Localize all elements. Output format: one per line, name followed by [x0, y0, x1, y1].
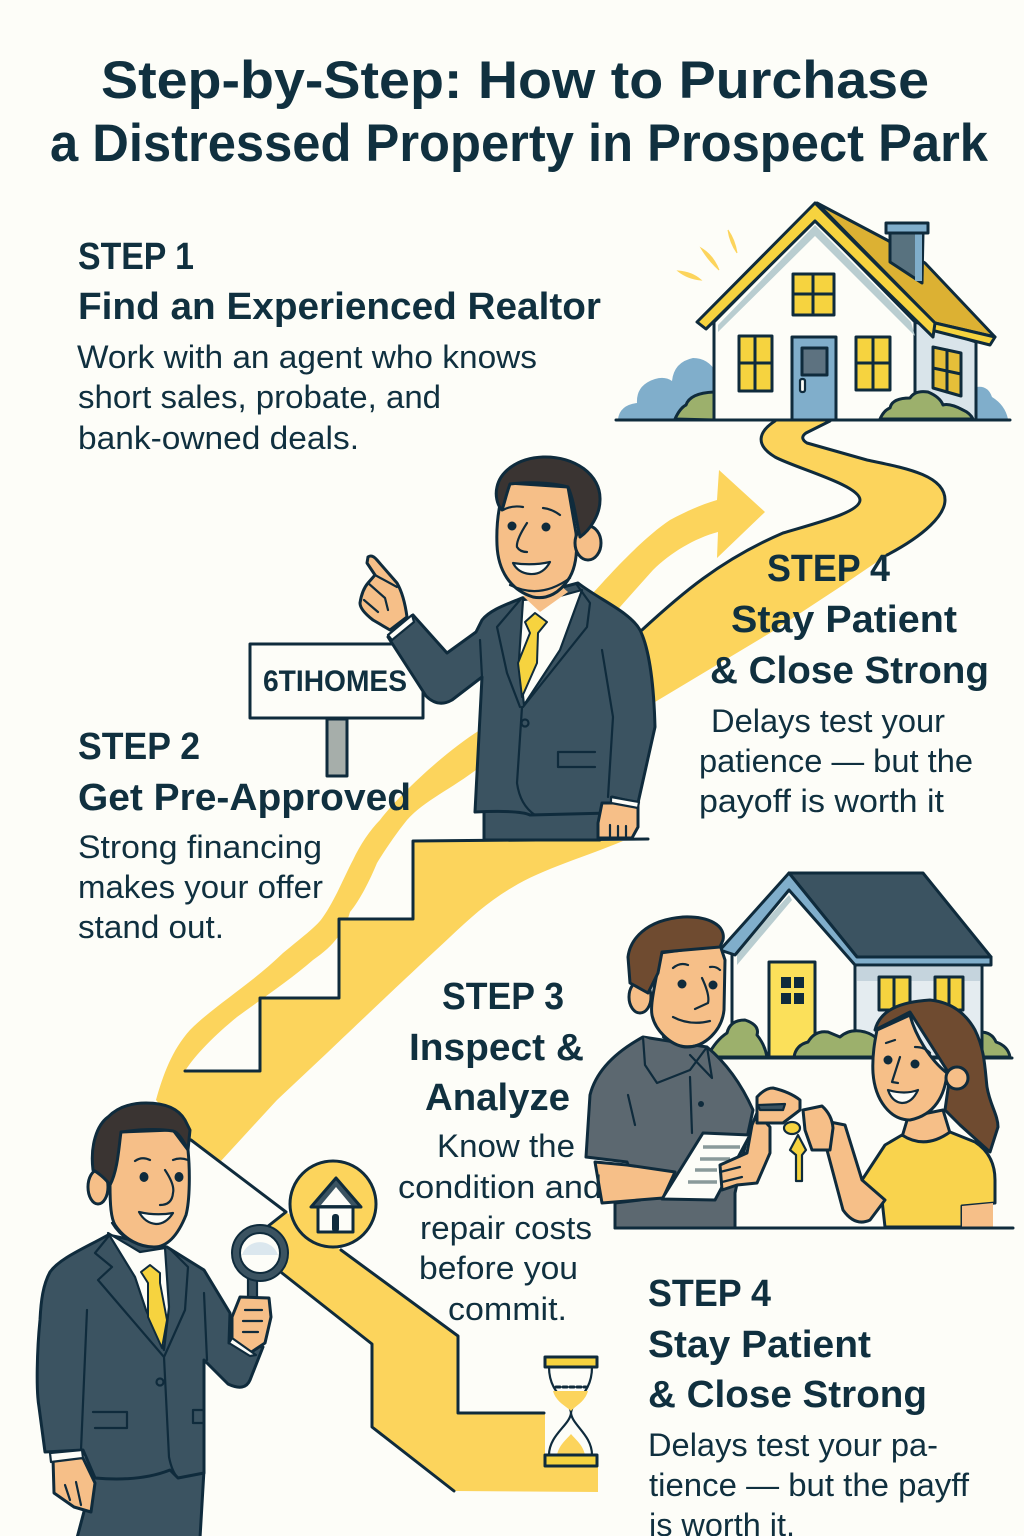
facial features: [503, 506, 570, 591]
shirt: [586, 1037, 753, 1228]
holding hand: [232, 1297, 271, 1353]
shirt: [108, 1233, 169, 1350]
text block: step 3: [398, 976, 602, 1327]
bushes in front: [675, 392, 714, 420]
sign: 6TIHOMES: [250, 644, 423, 776]
hand at side: [53, 1458, 95, 1512]
text block: step 3: repair costs: [420, 1210, 592, 1246]
sign: 6TIHOMES: 6TIHOMES: [263, 665, 407, 698]
text block: step 4 upper: Stay Patient: [731, 599, 957, 641]
illustration: man handing keys: [586, 917, 1013, 1228]
right wall: [855, 965, 982, 1057]
illustration: second house: [707, 873, 1012, 1058]
text block: step 4 lower: & Close Strong: [648, 1374, 927, 1416]
shirt: [519, 590, 582, 705]
cuff: [388, 615, 414, 640]
text block: step 3: condition and: [398, 1169, 602, 1205]
right arm and hand: [720, 1113, 770, 1190]
text block: step 1: Find an Experienced Realtor: [78, 286, 601, 328]
text block: step 4 lower: STEP 4: [648, 1273, 771, 1315]
yellow staircase: [156, 839, 648, 1162]
front wall: [714, 220, 915, 420]
curved arrow band: [156, 470, 765, 1100]
lower left window: [739, 336, 772, 391]
text block: step 4 lower: tience — but the payff: [649, 1467, 969, 1503]
dark roof: [789, 873, 991, 957]
collar and placket: [643, 1037, 712, 1083]
hair back: [875, 1000, 998, 1152]
title: a Distressed Property in Prospect Park: [50, 114, 988, 173]
yellow door: [769, 962, 815, 1057]
tie: [518, 613, 547, 697]
hair: [628, 917, 723, 993]
tie: [141, 1265, 167, 1348]
pointing hand: [360, 556, 407, 630]
text block: step 1: short sales, probate, and: [78, 379, 441, 415]
ear: [629, 981, 651, 1013]
keys: [784, 1122, 806, 1181]
jacket lines: [480, 585, 613, 815]
text block: step 1: bank-owned deals.: [78, 420, 359, 456]
ear: [946, 1067, 968, 1089]
jacket: [37, 1235, 263, 1479]
lower right window: [856, 337, 890, 390]
text block: step 4 lower: Stay Patient: [648, 1324, 871, 1366]
bushes behind house: [618, 358, 716, 420]
text block: step 2: Strong financing: [78, 829, 322, 865]
text block: step 3: STEP 3: [442, 976, 564, 1018]
text block: step 3: Analyze: [425, 1077, 570, 1119]
winding road to house: [642, 421, 945, 702]
side window: [933, 347, 961, 396]
jacket: [388, 583, 655, 815]
sleeve skin: [962, 1203, 993, 1227]
text block: step 4 lower: [648, 1273, 969, 1536]
chimney: [886, 223, 928, 283]
paper: [662, 1133, 750, 1200]
ear: [88, 1170, 108, 1204]
main roof: [817, 203, 995, 337]
left wall: [732, 890, 855, 1057]
shirt: [862, 1132, 995, 1227]
hand: [803, 1106, 833, 1150]
hair: [92, 1103, 190, 1185]
cuff: [50, 1450, 83, 1462]
ground line: [616, 418, 1010, 422]
trousers: [77, 1470, 204, 1536]
text block: step 3: Know the: [437, 1128, 575, 1164]
text block: step 2: [78, 726, 411, 945]
door: [792, 337, 836, 420]
trousers: [484, 808, 606, 840]
title: Step-by-Step: How to Purchase: [101, 51, 929, 110]
man's features: [112, 1158, 188, 1247]
text block: step 4 upper: Delays test your: [711, 703, 945, 739]
text block: step 3: before you: [419, 1250, 578, 1286]
text block: step 2: makes your offer: [78, 869, 323, 905]
front bushes: [707, 1020, 767, 1057]
text block: step 1: [77, 236, 601, 456]
lapels and seams: [81, 1237, 207, 1478]
magnifying glass: [232, 1225, 288, 1304]
icon: hourglass: [545, 1357, 597, 1466]
illustration: realtor with magnifying glass: [37, 1103, 288, 1536]
forearm: [595, 1162, 675, 1203]
face: [497, 483, 577, 598]
text block: step 4 upper: STEP 4: [767, 548, 890, 590]
man's features: [663, 964, 720, 1046]
text block: step 4 lower: Delays test your pa-: [648, 1427, 938, 1463]
icon: house in circle: [290, 1161, 376, 1247]
lower hand: [598, 803, 638, 838]
neck: [523, 585, 568, 612]
side wall: [915, 322, 976, 420]
arm: [827, 1122, 885, 1222]
text block: step 2: STEP 2: [78, 726, 200, 768]
text block: step 4 upper: [699, 548, 989, 819]
ear: [575, 526, 601, 560]
text block: step 4 upper: payoff is worth it: [699, 783, 944, 819]
neck: [902, 1110, 950, 1153]
face: [110, 1130, 189, 1247]
hair: [496, 457, 600, 537]
text block: step 4 upper: patience — but the: [699, 743, 973, 779]
text block: step 3: commit.: [448, 1291, 567, 1327]
title: [50, 51, 988, 173]
illustration: realtor pointing: [360, 457, 655, 840]
sparkle marks: [678, 230, 737, 280]
eave strips: [931, 323, 995, 345]
text block: step 2: stand out.: [78, 909, 224, 945]
text block: step 1: Work with an agent who knows: [77, 339, 537, 375]
illustration: woman receiving keys: [803, 1000, 998, 1227]
illustration: yellow house: [616, 203, 1010, 420]
windows: [879, 977, 963, 1010]
far bush: [980, 1032, 1010, 1057]
key fob hand: [757, 1088, 800, 1123]
text block: step 1: STEP 1: [78, 236, 194, 278]
woman's features: [886, 1040, 930, 1083]
text block: step 2: Get Pre-Approved: [78, 777, 411, 819]
neck and face: [652, 945, 725, 1047]
text block: step 4 upper: & Close Strong: [710, 650, 989, 692]
lower yellow path: [191, 1140, 598, 1492]
upper window: [793, 274, 834, 315]
text block: step 3: Inspect &: [409, 1027, 584, 1069]
face: [873, 1015, 947, 1120]
